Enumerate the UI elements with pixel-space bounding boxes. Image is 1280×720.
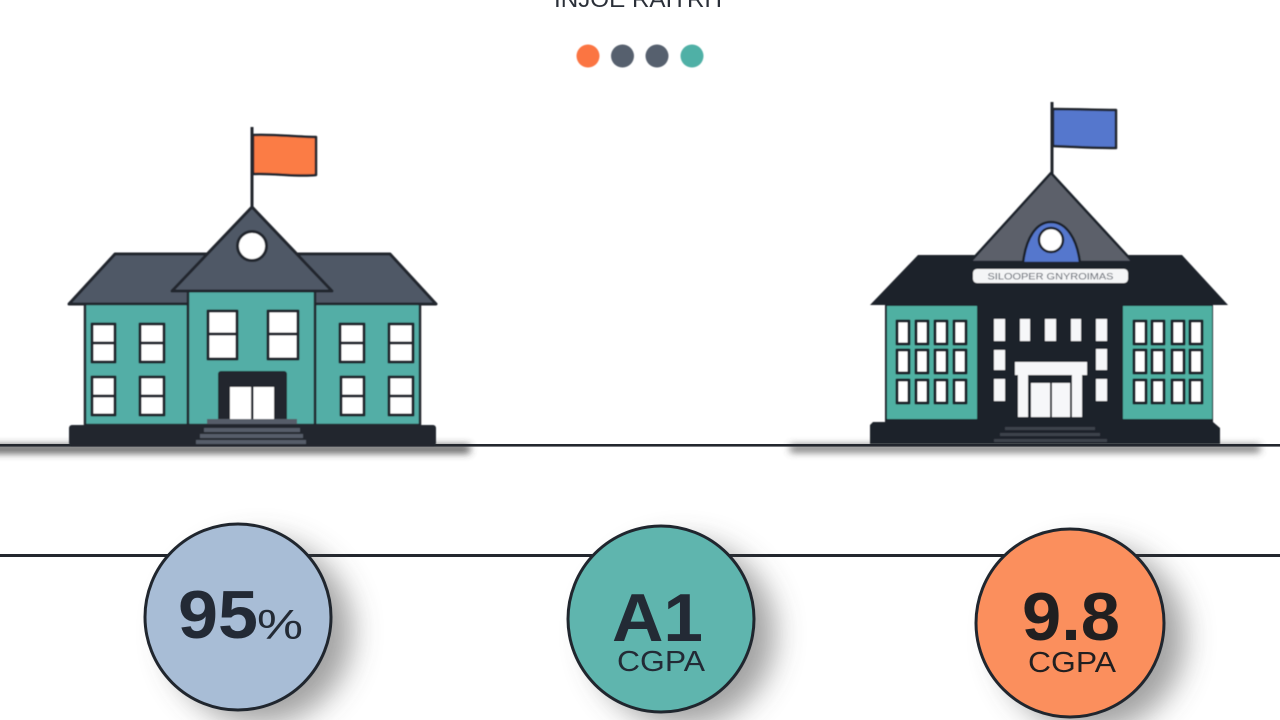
dark facade	[885, 304, 1213, 424]
decorative dots row	[576, 44, 704, 68]
portal entrance	[1015, 362, 1087, 417]
plinth	[870, 422, 1220, 444]
left wing wall	[85, 304, 188, 425]
stat: 9.8 CGPA	[976, 529, 1185, 720]
right wing wall	[315, 304, 420, 425]
divider line	[0, 554, 1280, 557]
centre wall	[188, 291, 315, 425]
left teal panel	[887, 306, 977, 419]
arch with round window	[1023, 222, 1080, 263]
gable round window	[238, 232, 266, 260]
gable	[970, 173, 1133, 262]
stat: 95%: %	[257, 601, 303, 648]
centre windows	[994, 319, 1107, 401]
stat: A1 CGPA: CGPA	[617, 646, 706, 678]
right school building	[870, 102, 1228, 444]
flag: blue	[1052, 102, 1116, 174]
plinth	[69, 425, 436, 446]
right teal panel	[1123, 306, 1212, 419]
stat: A1 CGPA	[568, 526, 775, 720]
stat: 9.8 CGPA: 9.8	[1022, 579, 1120, 655]
steps	[196, 419, 306, 444]
wings roof	[69, 254, 436, 304]
steps	[994, 427, 1107, 442]
stat: 9.8 CGPA: CGPA	[1028, 647, 1117, 679]
name banner	[973, 269, 1128, 283]
small windows	[92, 311, 413, 415]
main roof	[870, 255, 1228, 305]
centre gable	[172, 207, 332, 291]
ground line with shadows	[0, 444, 1280, 453]
flag: orange	[252, 127, 316, 208]
stat: 95%	[145, 524, 352, 720]
name banner: SILOOPER GNYROIMAS	[988, 272, 1114, 282]
left school building	[69, 127, 436, 446]
entrance	[218, 371, 287, 421]
stat: 95%: 95	[178, 577, 258, 653]
stat: A1 CGPA: A1	[612, 580, 703, 656]
